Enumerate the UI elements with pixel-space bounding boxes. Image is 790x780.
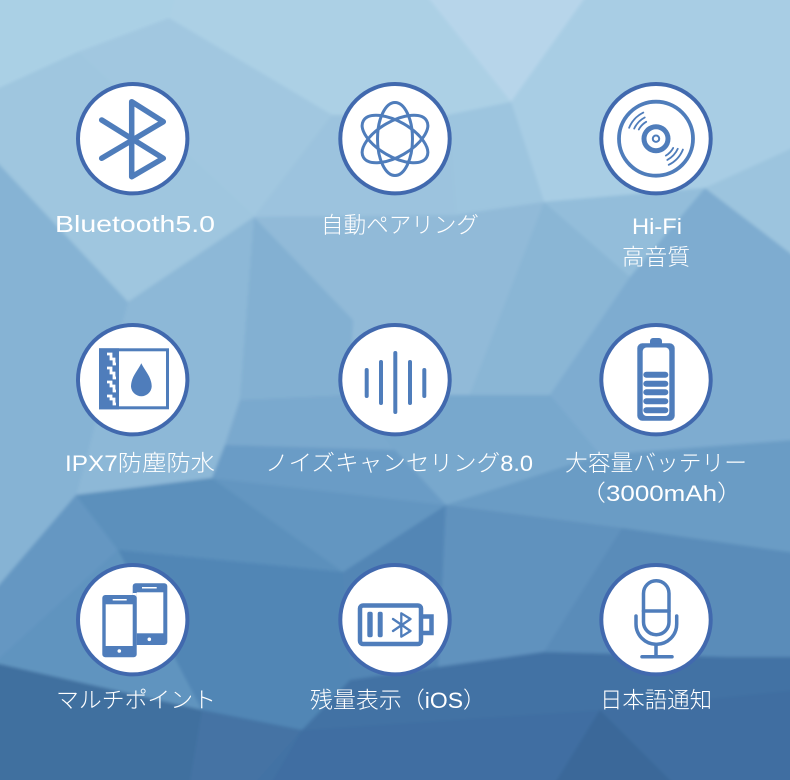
icon: Hi-Fi disc: [601, 84, 711, 193]
label: multipoint: マルチポイント: [56, 688, 216, 713]
icon: IPX7 water and dust proof: [78, 325, 187, 434]
icon: battery level with Bluetooth: [340, 565, 450, 674]
label: Hi-Fi high sound quality: [622, 214, 690, 270]
label: battery capacity: 大容量バッテリー: [565, 451, 747, 476]
label: Japanese voice notification: 日本語通知: [600, 688, 712, 713]
icon: multipoint phones: [78, 565, 187, 674]
label: auto pairing: 自動ペアリング: [321, 213, 479, 238]
icon: noise cancelling waveform: [340, 325, 450, 434]
icon: auto pairing atom: [340, 84, 450, 193]
icon: Bluetooth: [78, 84, 187, 193]
label: Hi-Fi high sound quality: 高音質: [622, 245, 690, 270]
label: battery level iOS: 残量表示（iOS）: [310, 688, 486, 713]
icon: microphone: [601, 565, 711, 674]
icon: battery: [601, 325, 711, 434]
label: battery capacity: [565, 451, 747, 506]
label: Hi-Fi high sound quality: Hi-Fi: [632, 214, 682, 239]
label: Bluetooth5.0: Bluetooth5.0: [55, 211, 215, 237]
label: battery capacity: （3000mAh）: [580, 481, 743, 506]
label: IPX7: IPX7防塵防水: [65, 451, 215, 476]
label: noise cancelling: ノイズキャンセリング8.0: [265, 451, 533, 476]
